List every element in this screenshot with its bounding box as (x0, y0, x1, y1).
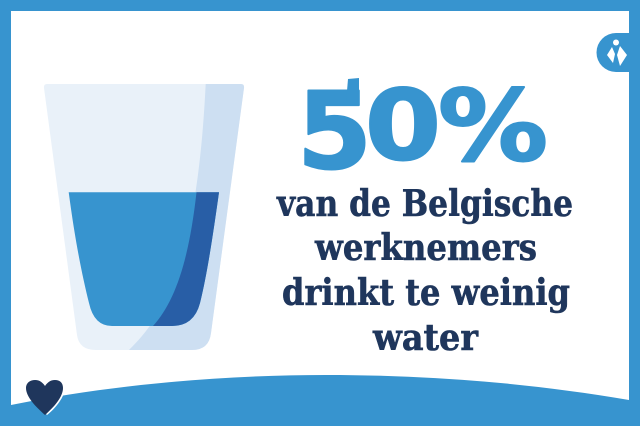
glass body (44, 84, 244, 350)
icon: heart (26, 380, 65, 415)
glass shaded side (129, 84, 244, 350)
text block: description: drinkt te weinig (282, 272, 570, 314)
water (69, 192, 219, 326)
headline: 50%: % (438, 70, 548, 184)
headline: 50% (297, 69, 548, 193)
headline: 50%: 0 (365, 69, 441, 182)
flag on top of the digit 5 (346, 78, 359, 103)
headline: 50%: 5 (297, 70, 372, 193)
text block: description: van de Belgische (276, 183, 573, 225)
icon: logo badge (596, 33, 630, 72)
text block: description (276, 183, 573, 359)
text block: description: werknemers (314, 227, 537, 269)
icon: glass of water (44, 84, 244, 350)
water shaded side (153, 192, 219, 326)
text block: description: water (372, 317, 479, 359)
